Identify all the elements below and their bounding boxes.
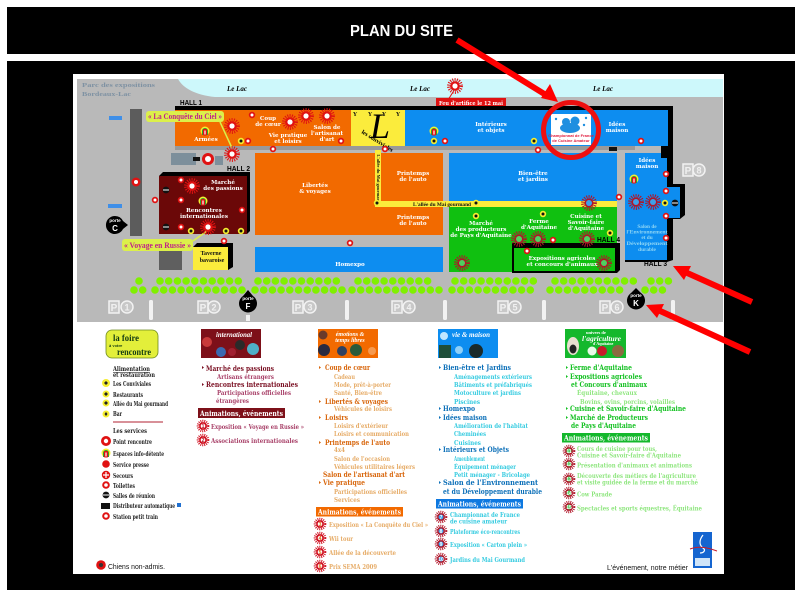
- exhibition callout: voyage en russie: [122, 231, 207, 251]
- les conviviales logo: [353, 106, 401, 154]
- legend: services: [101, 422, 181, 521]
- legend: food: [102, 366, 169, 418]
- events: emotions: 5: [319, 550, 322, 556]
- events: vie et maison: Jardins du Mai Gourmand: [449, 556, 525, 564]
- hall 1: [175, 100, 673, 154]
- header: agriculture: d'Aquitaine: [593, 341, 613, 346]
- list: agriculture: Marché de Producteurs: [570, 413, 648, 422]
- events: agriculture: Spectacles et sports équestres, Équitaine: [577, 504, 702, 512]
- grey service blocks: [159, 153, 223, 270]
- green hall: Savoir-faire: [568, 220, 605, 226]
- hall 1 labels: maison: [606, 128, 628, 134]
- list: international: Participations officielles: [217, 389, 291, 397]
- events: vie et maison: de cuisine amateur: [450, 518, 507, 526]
- taverne bavaroise: Taverne: [201, 251, 222, 257]
- legend: services: Service presse: [113, 462, 149, 469]
- lake: [178, 79, 723, 97]
- parking labels: P: [602, 303, 609, 314]
- legend: services: Point rencontre: [113, 439, 152, 446]
- events: emotions: Wii tour: [328, 535, 353, 543]
- hall 3: [625, 146, 685, 268]
- list: emotions: Printemps de l'auto: [325, 438, 390, 447]
- hall 3: l'Environnement: [626, 230, 668, 236]
- hall 1 labels: [193, 116, 628, 145]
- list: vie et maison: Motoculture et jardins: [454, 389, 521, 397]
- events: emotions: 3: [319, 522, 322, 528]
- hall 3: durable: [638, 247, 656, 253]
- arrow to championnat: [457, 40, 558, 102]
- legend: food: Les Conviviales: [113, 381, 151, 388]
- parking labels: 2: [211, 302, 217, 312]
- parking labels: 1: [124, 302, 130, 312]
- header: vie et maison: vie & maison: [452, 331, 490, 339]
- les conviviales logo: Y: [368, 112, 373, 118]
- legend: food: Alimentation: [112, 366, 151, 373]
- park name: Bordeaux-Lac: [82, 91, 131, 98]
- legend: services: Secours: [113, 473, 133, 480]
- hall 1 labels: l'artisanat: [311, 131, 343, 137]
- events: international: Animations, événements: [199, 409, 283, 418]
- white plan sheet: [73, 74, 724, 574]
- list: international: Marché des passions: [206, 364, 274, 373]
- legend: services: Espaces info-détente: [113, 451, 164, 458]
- list: vie et maison: Ameublement: [453, 455, 485, 463]
- hall 3: Développement: [626, 241, 668, 247]
- events: emotions: Exposition « La Conquête du Ciel »: [329, 521, 428, 529]
- events: international: Associations internationales: [210, 437, 298, 445]
- parking labels: P: [295, 303, 302, 314]
- events: agriculture: Cours de cuisine pour tous,: [577, 445, 657, 453]
- list: agriculture: Équitaine, chevaux: [577, 388, 637, 397]
- exhibition callout: la conquete du ciel: [146, 111, 232, 148]
- list: emotions: Cadeau: [334, 373, 355, 381]
- hall 4: et concours d'animaux: [527, 262, 598, 268]
- parking labels: P: [200, 303, 207, 314]
- parking labels: 8: [696, 166, 702, 176]
- les conviviales logo: L: [369, 106, 390, 146]
- list: emotions: Salon de l'artisanat d'art: [323, 470, 406, 479]
- list: vie et maison: Intérieurs et Objets: [443, 445, 509, 454]
- list: emotions: Coup de cœur: [325, 363, 370, 372]
- porte C: [106, 216, 128, 234]
- legend: services: Toilettes: [113, 483, 135, 490]
- hall 4: Expositions agricoles: [529, 256, 595, 262]
- parking labels: P: [394, 303, 401, 314]
- list: international: Artisans étrangers: [216, 373, 274, 381]
- events: international: Exposition « Voyage en Russie »: [211, 423, 304, 431]
- championnat de france logo: [548, 114, 595, 145]
- list: agriculture: de Pays d'Aquitaine: [571, 421, 636, 430]
- homexpo hall: [255, 247, 443, 272]
- green hall: Marché: [469, 220, 493, 227]
- hall 1 labels: et objets: [477, 128, 505, 134]
- events: emotions: Animations, événements: [317, 508, 401, 516]
- slogan: L'événement, notre métier: [607, 565, 689, 572]
- green hall: des producteurs: [456, 227, 506, 233]
- legend: no dogs: [96, 560, 165, 571]
- taverne bavaroise: [193, 243, 233, 270]
- list: vie et maison: [439, 363, 542, 496]
- la foire a votre rencontre badge: rencontre: [117, 347, 151, 357]
- list: vie et maison: Piscines: [454, 398, 480, 406]
- hall 4: [512, 237, 620, 273]
- header: emotions: temps libres: [335, 338, 365, 344]
- championnat de france logo: Championnat de France: [548, 133, 595, 138]
- parking labels: P: [500, 303, 507, 314]
- parking labels: P: [685, 166, 692, 177]
- events: agriculture: 15: [566, 505, 572, 511]
- list: emotions: 4x4: [334, 446, 345, 454]
- hall 3: et du: [641, 235, 653, 241]
- hall 1 labels: Intérieurs: [475, 121, 507, 128]
- taverne bavaroise: bavaroise: [200, 258, 225, 264]
- central orange labels: de l'auto: [399, 221, 427, 227]
- list: agriculture: [566, 363, 686, 430]
- list: vie et maison: Idées maison: [443, 413, 487, 422]
- events: vie et maison: 8: [440, 529, 443, 535]
- hall 1 labels: Vie pratique: [268, 133, 308, 139]
- green hall: d'Aquitaine: [568, 226, 604, 232]
- events: vie et maison: 7: [440, 515, 443, 521]
- les conviviales logo: Y: [382, 112, 387, 118]
- header: agriculture: [565, 329, 626, 358]
- events: agriculture: [562, 433, 702, 512]
- events: agriculture: 12: [566, 462, 572, 468]
- porte C: C: [112, 224, 118, 233]
- events: agriculture: Découverte des métiers de l'agriculture: [577, 472, 696, 480]
- events: international: [198, 408, 304, 445]
- list: agriculture: Bovins, ovins, porcins, volailles: [580, 398, 675, 406]
- hall 1: HALL 1: [180, 100, 202, 107]
- list: vie et maison: Petit ménager - Bricolage: [454, 471, 530, 479]
- list: agriculture: Expositions agricoles: [570, 372, 642, 381]
- list: vie et maison: et du Développement durable: [443, 487, 542, 496]
- events: vie et maison: Exposition « Carton plein »: [450, 541, 527, 549]
- list: vie et maison: Bien-être et Jardins: [443, 363, 511, 372]
- hall 2: des passions: [203, 186, 243, 192]
- events: emotions: Prix SEMA 2009: [329, 563, 377, 571]
- hall 2: HALL 2: [227, 166, 250, 173]
- highlight circle: [544, 102, 598, 158]
- hall 1 labels: Idées: [609, 121, 625, 128]
- hall 3: maison: [636, 164, 658, 170]
- central orange labels: Printemps: [397, 171, 429, 177]
- events: emotions: [315, 507, 428, 571]
- hall 2: [159, 166, 250, 234]
- header: emotions: émotions &: [336, 332, 365, 338]
- site map: [77, 79, 723, 322]
- events: vie et maison: Plateforme éco-rencontres: [450, 528, 520, 536]
- legend: services: Les services: [113, 428, 148, 435]
- list: vie et maison: Salon de l'Environnement: [443, 478, 539, 487]
- central orange labels: Printemps: [397, 215, 429, 221]
- bien-etre hall: Bien-être: [518, 170, 548, 177]
- hall 1 labels: Salon de: [313, 125, 341, 131]
- porte K: porte: [630, 293, 642, 298]
- fireworks callout: Feu d'artifice le 12 mai: [439, 101, 503, 107]
- events: agriculture: 11: [566, 449, 572, 455]
- legend: food: Restaurants: [113, 392, 143, 399]
- list: emotions: Véhicules utilitaires légers: [333, 463, 415, 471]
- green hall: d'Aquitaine: [521, 225, 557, 231]
- legend: food: Allée du Mai gourmand: [112, 401, 169, 408]
- events: emotions: 6: [319, 564, 322, 570]
- list: agriculture: et Concours d'animaux: [571, 380, 648, 389]
- parking labels: P: [111, 303, 118, 314]
- organiser logo: [690, 532, 717, 568]
- hall 1 labels: de cœur: [255, 122, 281, 128]
- lake labels: Le Lac: [409, 85, 430, 93]
- events: international: 2: [202, 438, 205, 444]
- legend: services: Salles de réunion: [113, 493, 155, 500]
- lake labels: Le Lac: [226, 85, 247, 93]
- exhibition callout: voyage en russie: « Voyage en Russie »: [124, 241, 191, 250]
- map service icons: [132, 112, 678, 254]
- title banner: [7, 7, 795, 54]
- porte C: porte: [109, 218, 121, 223]
- map ground: [77, 79, 723, 322]
- legend: food: et restauration: [113, 372, 156, 379]
- hall 3: Idées: [639, 157, 655, 164]
- list: international: Rencontres internationales: [206, 380, 298, 389]
- legend: food: Bar: [113, 411, 123, 418]
- events: international: 1: [202, 424, 205, 430]
- events: agriculture: Présentation d'animaux et animations: [577, 462, 692, 470]
- list: emotions: Loisirs: [325, 413, 348, 422]
- hall 1 labels: Coup: [260, 116, 276, 122]
- allee du mai gourmand: [375, 150, 617, 208]
- header: international: international: [216, 331, 252, 339]
- list: emotions: Services: [334, 496, 360, 504]
- list: vie et maison: Amélioration de l'habitat: [453, 422, 528, 430]
- fireworks callout: [436, 80, 506, 107]
- list: emotions: Véhicules de loisirs: [333, 405, 392, 413]
- bien-etre hall: [449, 153, 617, 201]
- column: vie et maison: [436, 329, 542, 564]
- green hall: Ferme: [529, 219, 549, 225]
- la foire a votre rencontre badge: [106, 330, 158, 358]
- list: emotions: Mode, prêt-à-porter: [334, 381, 391, 389]
- lake labels: Le Lac: [592, 85, 613, 93]
- header: emotions: [318, 329, 378, 358]
- header: vie et maison: [438, 329, 498, 358]
- la foire a votre rencontre badge: la foire: [113, 333, 139, 343]
- hall 1 labels: d'art: [320, 137, 335, 143]
- events: vie et maison: 9: [440, 542, 443, 548]
- green hall: de Pays d'Aquitaine: [450, 233, 512, 239]
- legend: services: Distributeur automatique: [113, 503, 175, 510]
- bien-etre hall: et jardins: [518, 177, 548, 183]
- header: agriculture: univers de: [586, 330, 606, 335]
- parking trees: [134, 281, 673, 290]
- column: emotions et temps libres: [315, 329, 428, 571]
- porte F: porte: [242, 296, 254, 301]
- events: emotions: 4: [319, 536, 322, 542]
- list: agriculture: Cuisine et Savoir-faire d'Aquitaine: [570, 404, 686, 413]
- events: agriculture: et visite guidée de la ferme et du marché: [577, 478, 698, 486]
- events: vie et maison: Championnat de France: [450, 511, 520, 519]
- column: international: [198, 329, 304, 445]
- parking labels: [109, 164, 705, 314]
- parking labels: 3: [307, 302, 313, 312]
- events: agriculture: Cuisine et Savoir-faire d'Aquitaine: [577, 452, 681, 460]
- park name: [82, 82, 156, 98]
- hall 4: HALL 4: [597, 237, 620, 244]
- la foire a votre rencontre badge: à votre: [109, 343, 122, 348]
- title: PLAN DU SITE: [350, 23, 453, 40]
- list: vie et maison: Cheminées: [454, 430, 486, 438]
- hall 3: HALL 3: [644, 261, 667, 268]
- list: vie et maison: Homexpo: [443, 404, 475, 413]
- list: emotions: Vie pratique: [322, 478, 365, 487]
- hall 2: Marché: [211, 179, 235, 186]
- allee du mai gourmand: L'allée du Mai gourmand: [413, 202, 471, 208]
- list: emotions: Salon de l'occasion: [334, 455, 390, 463]
- column: agriculture: [562, 329, 702, 512]
- list: vie et maison: Cuisines: [454, 439, 481, 447]
- porte K: K: [633, 299, 639, 308]
- les conviviales logo: les conviviales: [360, 130, 394, 154]
- map event stars: [186, 110, 659, 269]
- list: emotions: Libertés & voyages: [325, 397, 388, 406]
- parking labels: 6: [614, 302, 620, 312]
- central orange labels: Libertés: [302, 182, 328, 189]
- list: emotions: Loisirs d'extérieur: [334, 422, 388, 430]
- allee du mai gourmand: L'allée du Mai gourmand: [376, 154, 381, 204]
- central orange labels: & voyages: [299, 189, 331, 195]
- hall 2: internationales: [180, 214, 228, 220]
- events: agriculture: Animations, événements: [563, 434, 648, 442]
- events: vie et maison: [436, 499, 527, 564]
- events: emotions: Allée de la découverte: [328, 549, 396, 557]
- events: agriculture: 13: [566, 477, 572, 483]
- parking bollards: [149, 300, 675, 321]
- central orange labels: de l'auto: [399, 177, 427, 183]
- header: agriculture: l'agriculture: [582, 335, 621, 343]
- hall 1 labels: Armées: [193, 136, 218, 143]
- porte F: [239, 290, 257, 312]
- arrow to hall 3: [673, 266, 752, 302]
- list: emotions: Santé, Bien-être: [334, 389, 382, 397]
- events: agriculture: 14: [566, 491, 572, 497]
- blue parking marks: [108, 116, 122, 208]
- green hall: Cuisine et: [570, 214, 602, 220]
- hall 3: Salon de: [637, 224, 657, 230]
- championnat de france logo: de Cuisine Amateur: [552, 138, 590, 143]
- central orange halls: [255, 153, 443, 235]
- les conviviales logo: Y: [353, 112, 358, 118]
- list: vie et maison: Bâtiments et préfabriqués: [454, 381, 532, 389]
- list: vie et maison: Aménagements extérieurs: [453, 373, 532, 381]
- list: emotions: Loisirs et communication: [334, 430, 409, 438]
- service road: [130, 109, 142, 236]
- porte K: [627, 288, 645, 309]
- green hall: [449, 207, 617, 272]
- exhibition callout: la conquete du ciel: « La Conquête du Ciel »: [148, 112, 222, 121]
- homexpo hall: Homexpo: [335, 262, 365, 268]
- events: vie et maison: 10: [438, 557, 444, 563]
- list: emotions: Participations officielles: [334, 488, 407, 496]
- list: international: [202, 364, 298, 405]
- arrow to porte K: [646, 304, 750, 352]
- list: international: étrangères: [216, 397, 249, 405]
- legend: no dogs: Chiens non-admis.: [108, 564, 165, 571]
- list: vie et maison: Équipement ménager: [454, 462, 516, 471]
- legend: services: Station petit train: [113, 514, 158, 521]
- parking labels: 4: [406, 302, 412, 312]
- hall 2: Rencontres: [186, 208, 222, 214]
- events: agriculture: Cow Parade: [577, 490, 612, 498]
- lake labels: [226, 85, 613, 93]
- porte F: F: [246, 302, 251, 311]
- list: agriculture: Ferme d'Aquitaine: [570, 363, 632, 372]
- central orange labels: [299, 171, 429, 227]
- les conviviales logo: Y: [396, 112, 401, 118]
- hall 1 labels: et loisirs: [274, 139, 302, 145]
- events: vie et maison: Animations, événements: [437, 500, 521, 508]
- list: emotions: [319, 363, 415, 504]
- park name: Parc des expositions: [82, 82, 156, 89]
- parking labels: 5: [512, 302, 518, 312]
